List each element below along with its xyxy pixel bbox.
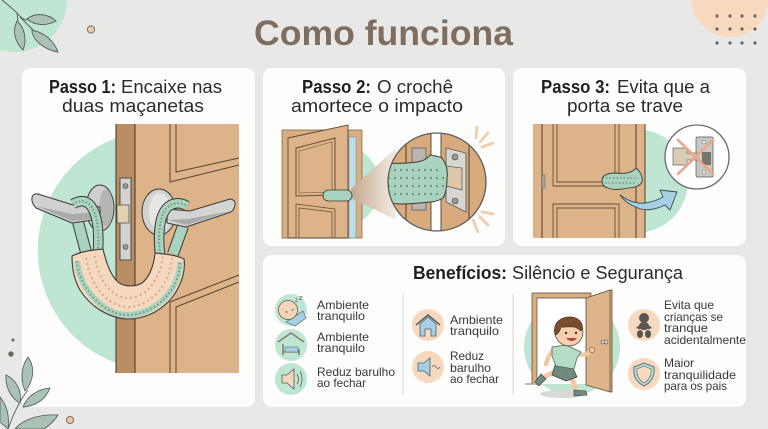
divider bbox=[403, 294, 513, 395]
heading: passo 2 bbox=[291, 77, 463, 116]
benefit: criança: crianças se bbox=[664, 310, 723, 324]
green circle background bbox=[38, 138, 116, 363]
panel: passo 2 bbox=[263, 68, 505, 246]
benefit: criança: acidentalmente bbox=[664, 333, 746, 347]
open door bbox=[282, 125, 362, 238]
heading: passo 1: Passo 1: bbox=[49, 77, 116, 97]
benefit: escudo bbox=[628, 356, 736, 393]
heading: passo 1 bbox=[49, 77, 222, 116]
heading: benefícios bbox=[413, 263, 684, 283]
benefit: bebê bbox=[275, 294, 369, 326]
crochet pad on door bbox=[323, 190, 352, 201]
heading: passo 2: O crochê bbox=[377, 77, 453, 97]
title: Como funciona bbox=[254, 14, 514, 53]
benefit: criança: Evita que bbox=[664, 298, 714, 312]
benefit: criança bbox=[628, 298, 746, 347]
heading: passo 2: Passo 2: bbox=[302, 77, 371, 97]
zoom circle bbox=[384, 130, 486, 234]
cone of zoom bbox=[351, 148, 396, 220]
right door handle bbox=[142, 189, 235, 235]
impact lines bbox=[473, 127, 493, 232]
door bbox=[116, 124, 239, 373]
heading: passo 1: duas maçanetas bbox=[62, 96, 204, 116]
heading: passo 3: Passo 3: bbox=[541, 77, 610, 97]
decoration: top left leaves bbox=[0, 0, 67, 52]
benefit: casa: tranquilo bbox=[450, 324, 499, 338]
heading: passo 2: amortece o impacto bbox=[291, 96, 463, 116]
benefit: alto-falante: ao fechar bbox=[450, 372, 499, 386]
benefit: casa: Ambiente bbox=[450, 313, 503, 327]
benefit: bebê: Ambiente bbox=[317, 298, 369, 312]
heading: passo 3: porta se trave bbox=[567, 96, 683, 116]
heading: passo 3 bbox=[541, 77, 711, 116]
heading: passo 3: Evita que a bbox=[617, 77, 711, 97]
benefit: som bbox=[275, 363, 395, 395]
green circle background bbox=[296, 144, 380, 228]
green circle background bbox=[584, 129, 688, 233]
door plate and latch bbox=[117, 178, 131, 260]
left door handle bbox=[32, 185, 114, 231]
benefit: alto-falante bbox=[412, 349, 499, 386]
benefit: quarto: Ambiente bbox=[317, 330, 369, 344]
benefit: alto-falante: barulho bbox=[450, 361, 491, 375]
decoration: bottom left leaves bbox=[0, 338, 58, 429]
benefit: criança: tranque bbox=[664, 321, 708, 335]
benefit: bebê: z bbox=[295, 298, 298, 304]
panel: passo 3 bbox=[513, 68, 746, 246]
decoration: small peach dot bottom bbox=[66, 416, 74, 424]
benefit: som: ao fechar bbox=[317, 376, 366, 390]
benefit: escudo: para os pais bbox=[664, 379, 727, 393]
decoration: small peach dot bbox=[87, 26, 95, 33]
decoration: top right peach blob and dots bbox=[691, 0, 768, 45]
crochet pad bbox=[602, 168, 642, 190]
heading: benefícios: Benefícios: bbox=[413, 263, 507, 283]
panel: passo 1 bbox=[22, 68, 255, 407]
benefit: som: Reduz barulho bbox=[317, 365, 395, 379]
crochet holder bbox=[72, 201, 187, 319]
front strap left bbox=[73, 201, 98, 252]
heading: passo 1: Encaixe nas bbox=[121, 77, 222, 97]
illustration: criança correndo pela porta bbox=[524, 290, 620, 398]
benefit: bebê: tranquilo bbox=[317, 309, 365, 323]
benefit: quarto bbox=[275, 329, 369, 361]
benefit: quarto: tranquilo bbox=[317, 341, 365, 355]
blue arrow bbox=[620, 190, 677, 210]
benefit: bebê: z bbox=[299, 295, 303, 302]
benefit: casa bbox=[412, 309, 503, 341]
front strap right bbox=[159, 203, 187, 254]
closed door bbox=[533, 124, 645, 238]
U body bbox=[72, 249, 184, 319]
benefit: escudo: Maior bbox=[664, 356, 694, 370]
benefit: alto-falante: Reduz bbox=[450, 349, 484, 363]
benefit: escudo: tranquilidade bbox=[664, 368, 736, 382]
crochet back straps bbox=[78, 222, 183, 254]
panel: benefícios bbox=[263, 255, 746, 407]
heading: benefícios: Silêncio e Segurança bbox=[512, 263, 684, 283]
latch zoom circle bbox=[665, 125, 729, 189]
